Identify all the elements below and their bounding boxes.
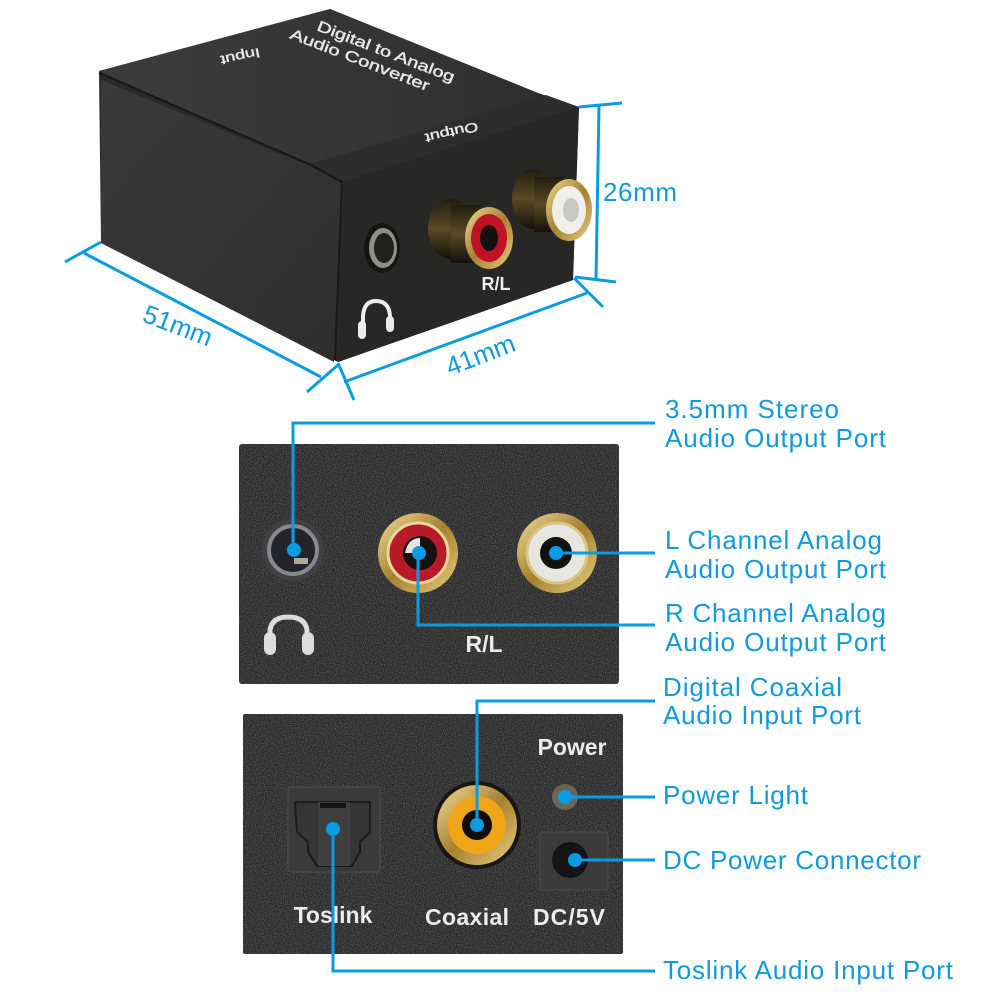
callout: power light xyxy=(558,780,809,810)
callout: Toslink input: Toslink Audio Input Port xyxy=(663,955,954,985)
coaxial socket xyxy=(433,781,521,869)
dimension: 26mm: 26mm xyxy=(603,177,677,207)
callout: digital coaxial: Audio Input Port xyxy=(663,700,862,730)
callout: L channel: Audio Output Port xyxy=(665,554,887,584)
DC socket xyxy=(540,832,608,890)
callout: L channel xyxy=(549,525,887,584)
headphone symbol xyxy=(270,617,308,649)
headphone jack on box xyxy=(364,223,400,273)
top face lettering: Audio Converter xyxy=(288,26,432,95)
panel labels: DC/5V xyxy=(533,904,606,930)
side face of box xyxy=(101,80,342,362)
panel labels: Toslink xyxy=(294,902,373,928)
panel labels xyxy=(294,734,607,930)
callout: L channel: L Channel Analog xyxy=(665,525,882,555)
R/L label on box: R/L xyxy=(482,274,510,294)
callout: digital coaxial xyxy=(470,672,862,832)
top face lettering: Output xyxy=(423,119,480,146)
dimension: 51mm: 51mm xyxy=(139,299,217,352)
callout: digital coaxial: Digital Coaxial xyxy=(663,672,842,702)
front face of box xyxy=(338,107,579,362)
callout: DC connector: DC Power Connector xyxy=(663,845,921,875)
power LED xyxy=(552,784,578,810)
product photo: converter box xyxy=(99,9,592,362)
panel: input side xyxy=(243,714,623,954)
output lip strip xyxy=(313,95,579,182)
stereo jack xyxy=(262,519,324,581)
callout: stereo output: Audio Output Port xyxy=(665,423,887,453)
headphone symbol on box xyxy=(362,301,390,335)
top face lettering: Input xyxy=(219,45,261,68)
panel plate xyxy=(239,444,619,684)
top face lettering: Digital to Analog xyxy=(315,18,457,86)
callout: R channel xyxy=(412,546,887,657)
callout: stereo output: 3.5mm Stereo xyxy=(665,394,839,424)
box silhouette xyxy=(99,9,579,362)
callout: R channel: Audio Output Port xyxy=(665,627,887,657)
right RCA socket on box xyxy=(512,169,592,241)
callout: stereo output xyxy=(287,394,887,557)
panel labels: Coaxial xyxy=(425,904,509,930)
dimension: 51mm xyxy=(65,242,338,392)
top face lettering xyxy=(219,18,480,146)
red RCA socket xyxy=(378,513,458,593)
panel plate xyxy=(243,714,623,954)
callout: Toslink input xyxy=(326,822,954,985)
dimension: 41mm: 41mm xyxy=(441,328,519,382)
callout: R channel: R Channel Analog xyxy=(665,598,886,628)
left RCA socket on box xyxy=(428,199,513,269)
panel labels: Power xyxy=(537,734,607,760)
callout: power light: Power Light xyxy=(663,780,809,810)
R/L label: R/L xyxy=(465,631,503,657)
Toslink socket xyxy=(288,787,380,872)
top face of box xyxy=(99,9,540,164)
white RCA socket xyxy=(517,513,597,593)
panel: output side xyxy=(239,444,619,684)
dimension: 26mm xyxy=(575,103,677,282)
dimension: 41mm xyxy=(338,278,603,400)
